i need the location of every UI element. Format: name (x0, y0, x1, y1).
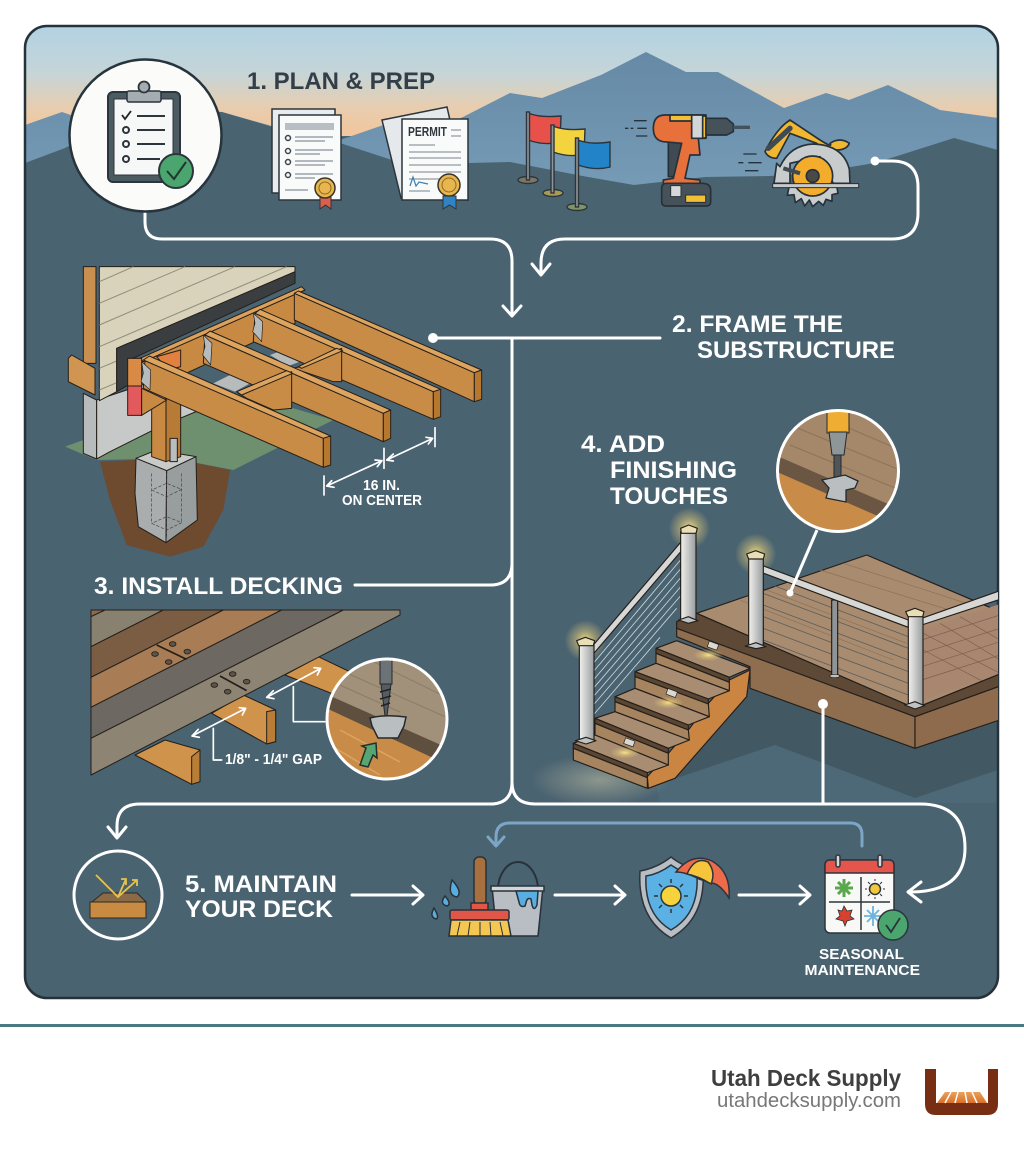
inset: hidden fastener detail (326, 658, 448, 780)
deck fascia (677, 613, 1000, 748)
heading: step 4: 4. ADD (581, 431, 665, 458)
stair stringer (647, 670, 750, 788)
deck cables (763, 582, 908, 695)
icon: power drill (625, 115, 750, 206)
joists below boards (135, 657, 357, 784)
heading: step 2 (672, 311, 895, 364)
heading: step 5 (185, 871, 337, 923)
ground: grass (65, 403, 333, 470)
inset: railing fastener detail (777, 408, 900, 535)
connector arrows (108, 156, 965, 904)
rim board (140, 287, 305, 362)
heading: step 5: 5. MAINTAIN (185, 871, 337, 898)
stair treads (573, 641, 750, 788)
house siding (99, 267, 295, 401)
dimension: 16 in on center (324, 428, 435, 495)
flashing band (117, 272, 295, 392)
label: seasonal maintenance: SEASONAL (819, 947, 904, 963)
icon: broom and bucket (432, 857, 544, 936)
icon: permit document: PERMIT (408, 124, 447, 139)
joist 2 (203, 331, 391, 442)
ledger back wall (142, 293, 295, 388)
gap arrows (192, 668, 325, 760)
footer brand text (711, 1065, 901, 1112)
icon: deck in circle (74, 851, 162, 939)
underside metal (213, 350, 300, 392)
blocking (237, 371, 293, 410)
heading: step 2: SUBSTRUCTURE (697, 337, 895, 364)
heading: step 4: TOUCHES (610, 483, 728, 510)
heading: step 4: FINISHING (610, 457, 737, 484)
lamp glows (566, 509, 775, 659)
joist 3 (253, 309, 441, 419)
concrete pier (135, 450, 197, 543)
label: seasonal maintenance: MAINTENANCE (804, 963, 920, 979)
stair cables (593, 557, 683, 715)
icon: document with seal (272, 109, 341, 209)
icon: weather shield with umbrella (640, 857, 729, 938)
heading: step 4 (581, 431, 737, 510)
beam tag (128, 350, 181, 415)
deck boards (91, 610, 400, 775)
post (152, 398, 181, 462)
footer divider (0, 1024, 1024, 1027)
ground: soil (100, 458, 230, 557)
icon: survey flags (518, 112, 610, 210)
icon: circular saw (738, 120, 859, 207)
label: 16 in on center: 16 IN. (363, 478, 400, 494)
label: seasonal maintenance (804, 947, 920, 979)
label: 16 in on center: ON CENTER (342, 493, 422, 509)
deck surface (697, 555, 1000, 708)
blocking (293, 348, 343, 382)
footer brand text: Utah Deck Supply (711, 1065, 901, 1091)
icon: seasonal calendar (825, 855, 908, 940)
wood block (68, 355, 95, 395)
icon: permit document (382, 107, 468, 209)
heading: step 3: 3. INSTALL DECKING (94, 573, 343, 600)
footer logo (925, 1069, 998, 1115)
concrete foundation wall (83, 377, 200, 459)
label: gap size: 1/8" - 1/4" GAP (225, 752, 322, 768)
joist 1 (141, 356, 331, 467)
heading: step 1: 1. PLAN & PREP (247, 68, 435, 95)
railing posts (575, 525, 925, 744)
joist 4 (294, 291, 482, 402)
icon: clipboard in circle (70, 60, 222, 212)
illustration: finished deck with railing and stairs (565, 508, 1000, 788)
step lights (610, 641, 723, 759)
baluster (832, 600, 838, 676)
corner trim (83, 267, 96, 363)
label: 16 in on center (342, 478, 422, 509)
footer brand text: utahdecksupply.com (717, 1090, 901, 1112)
heading: step 2: 2. FRAME THE (672, 311, 843, 338)
top rails (593, 538, 1000, 654)
callout lines and dots (786, 530, 828, 804)
illustration: installing decking (91, 610, 400, 784)
heading: step 5: YOUR DECK (185, 896, 334, 923)
illustration: deck substructure framing (65, 267, 482, 557)
